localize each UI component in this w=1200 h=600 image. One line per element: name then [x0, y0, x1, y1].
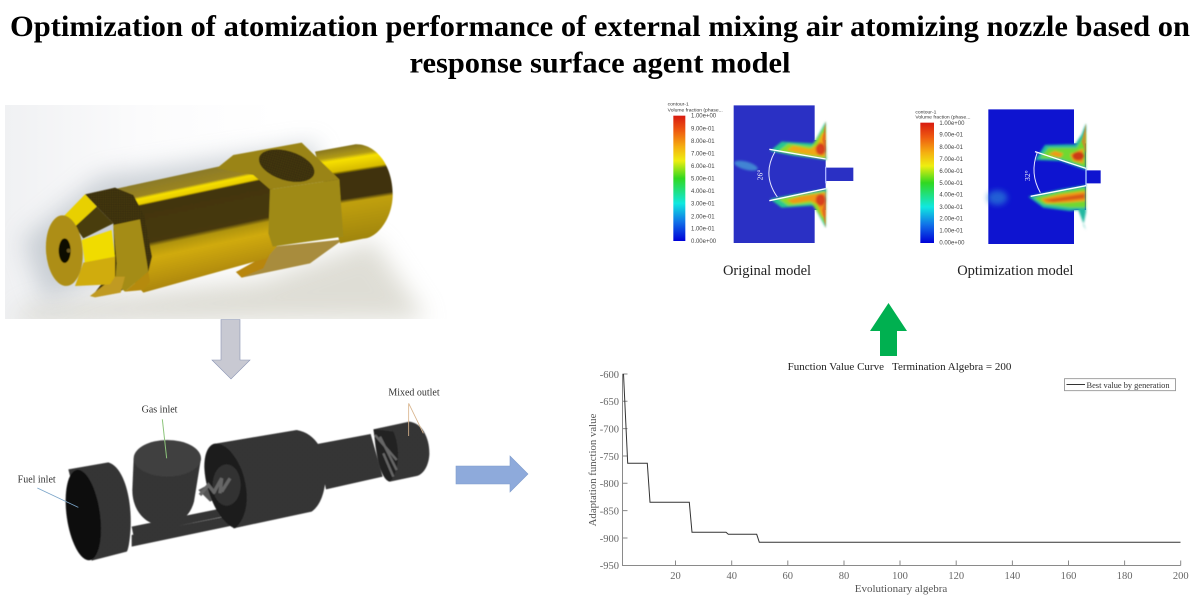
y tick labels: -800	[600, 479, 619, 490]
colour bar: 1.00e+00	[691, 114, 717, 120]
legend: Best value by generation	[1086, 381, 1170, 390]
contour field	[733, 105, 853, 243]
colour bar: 0.00e+00	[939, 241, 965, 247]
rear cylinder	[315, 144, 393, 243]
legend	[1064, 379, 1176, 391]
panel: computational mesh model	[18, 388, 440, 563]
colour bar: 1.00e-01	[939, 229, 964, 235]
title: response surface agent model	[410, 48, 790, 80]
main cylinder	[113, 163, 277, 293]
colour bar: 7.00e-01	[691, 151, 715, 157]
x tick labels: 140	[1005, 571, 1020, 582]
neck tube	[317, 434, 383, 489]
label: fuel inlet	[18, 475, 78, 507]
colour bar: 1.00e-01	[691, 227, 715, 233]
colour bar: 7.00e-01	[939, 157, 964, 163]
x tick labels: 80	[839, 571, 849, 582]
block side hole	[255, 143, 318, 188]
colour bar: 9.00e-01	[691, 126, 715, 132]
label: mixed outlet: Mixed outlet	[388, 388, 440, 399]
colour bar: 0.00e+00	[691, 239, 717, 245]
colour bar: Volume fraction (phase...	[915, 115, 970, 121]
underside wedge	[236, 239, 343, 278]
y tick labels: -650	[600, 397, 619, 408]
label: gas inlet: Gas inlet	[142, 405, 178, 416]
colour bar: 5.00e-01	[939, 181, 964, 187]
caption: Original model	[723, 263, 811, 279]
colour bar: 3.00e-01	[939, 205, 964, 211]
panel: rendered brass nozzle model	[5, 105, 457, 323]
colour bar: Volume fraction (phase...	[668, 108, 723, 114]
y tick labels: -750	[600, 452, 619, 463]
angle value: 26°	[756, 170, 765, 180]
colour bar: 4.00e-01	[939, 193, 964, 199]
x tick labels: 60	[783, 571, 793, 582]
large body cylinder	[213, 430, 326, 528]
caption: Optimization model	[957, 263, 1073, 279]
title: Optimization of atomization performance of external mixing air atomizing nozzle based on	[10, 11, 1190, 43]
colour bar: 3.00e-01	[691, 202, 715, 208]
x axis label: Evolutionary algebra	[855, 583, 947, 595]
colour bar: 1.00e+00	[939, 121, 965, 127]
outlet section	[373, 422, 429, 482]
panel: original model contour	[668, 102, 853, 279]
colour bar: 8.00e-01	[939, 145, 964, 151]
spray angle lines	[1031, 152, 1086, 196]
y tick labels: -950	[600, 561, 619, 572]
axes	[622, 374, 1181, 566]
line chart: function value curve	[587, 361, 1189, 595]
colour bar: 9.00e-01	[939, 133, 964, 139]
x tick labels: 180	[1117, 571, 1132, 582]
block top	[217, 143, 339, 189]
x tick labels	[670, 571, 1189, 582]
nose end face	[44, 214, 85, 287]
colour bar: 2.00e-01	[691, 214, 715, 220]
data line	[624, 374, 1180, 542]
y tick labels: -600	[600, 370, 619, 381]
panel: optimization model contour	[915, 109, 1101, 279]
fuel rods	[132, 508, 235, 547]
x tick labels: 120	[948, 571, 964, 582]
colour bar	[668, 102, 723, 245]
x tick labels: 200	[1173, 571, 1189, 582]
hex collar	[85, 188, 152, 297]
fuel inlet disk	[68, 462, 131, 561]
contour field	[987, 109, 1101, 244]
x tick labels: 160	[1061, 571, 1076, 582]
colour bar	[915, 110, 970, 247]
colour bar: contour-1	[668, 102, 689, 108]
nozzle orifice	[59, 238, 71, 263]
x tick labels: 20	[670, 571, 681, 582]
angle value: 32°	[1023, 170, 1032, 181]
colour bar: 6.00e-01	[691, 164, 715, 170]
spray angle lines	[769, 149, 826, 201]
colour bar: 2.00e-01	[939, 217, 964, 223]
gas inlet cylinder	[132, 458, 201, 526]
block front face	[268, 179, 343, 247]
title	[10, 11, 1190, 80]
label: mixed outlet	[388, 388, 440, 436]
y tick labels: -850	[600, 506, 619, 518]
x tick labels: 40	[726, 571, 737, 582]
label: gas inlet	[142, 405, 178, 458]
nose cone	[63, 194, 97, 228]
arrow: grey down	[212, 320, 250, 379]
y tick labels: -900	[600, 534, 619, 545]
y tick labels: -700	[600, 424, 619, 436]
arrow: green up	[870, 303, 907, 356]
y tick labels	[600, 370, 619, 572]
colour bar: 5.00e-01	[691, 177, 715, 183]
colour bar: 6.00e-01	[939, 169, 964, 175]
arrow: blue right	[456, 456, 528, 492]
colour bar: contour-1	[915, 110, 937, 116]
colour bar: 4.00e-01	[691, 189, 715, 195]
colour bar: 8.00e-01	[691, 139, 715, 145]
chart title: Function Value Curve Termination Algebra = 200	[788, 361, 1012, 373]
swirl channels	[198, 478, 230, 502]
x tick labels: 100	[892, 571, 908, 582]
label: fuel inlet: Fuel inlet	[18, 475, 56, 486]
y axis label: Adaptation function value	[587, 413, 599, 526]
